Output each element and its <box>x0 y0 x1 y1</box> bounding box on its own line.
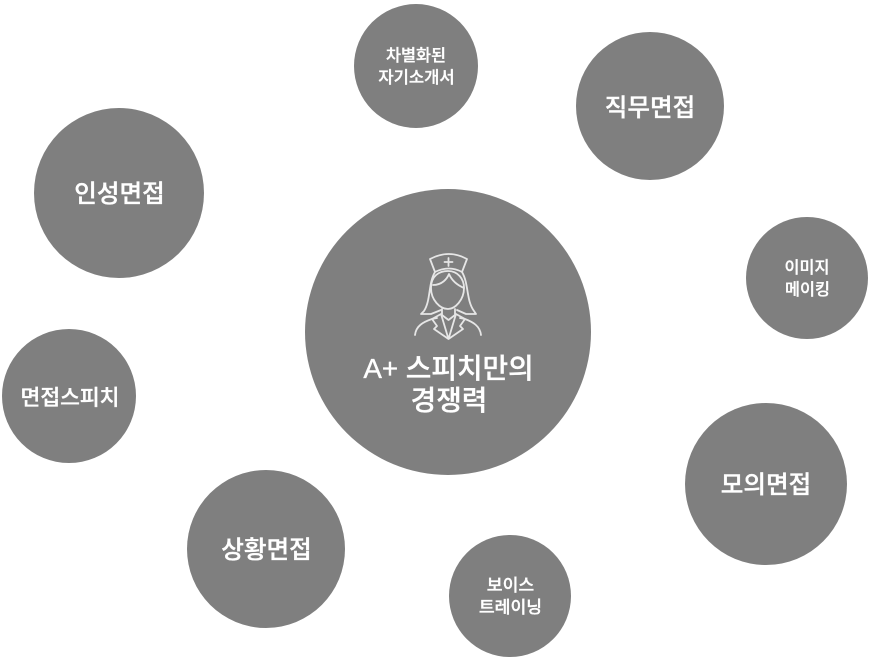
circle: 보이스 트레이닝: 트레이닝 <box>479 597 542 617</box>
circle: 이미지 메이킹: 이미지 <box>785 259 829 277</box>
circle: 상황면접 <box>187 470 345 628</box>
icon: nurse <box>415 254 481 339</box>
circle: 차별화된 자기소개서: 자기소개서 <box>378 68 455 87</box>
central circle: A+ 스피치만의 경쟁력: 경쟁력 <box>411 385 487 416</box>
circle: 이미지 메이킹 <box>746 217 868 339</box>
circle: 보이스 트레이닝: 보이스 <box>487 575 534 595</box>
circle: 직무면접 <box>576 32 724 180</box>
circle: 직무면접: 직무면접 <box>605 94 695 122</box>
circle: 면접스피치 <box>2 329 136 463</box>
central circle: A+ 스피치만의 경쟁력: A+ 스피치만의 <box>363 353 534 384</box>
circle: 면접스피치: 면접스피치 <box>21 386 119 410</box>
circle: 모의면접: 모의면접 <box>721 471 811 499</box>
circle: 인성면접: 인성면접 <box>74 180 165 208</box>
circle: 상황면접: 상황면접 <box>221 536 312 564</box>
central circle: A+ 스피치만의 경쟁력 <box>305 189 591 475</box>
circle: 보이스 트레이닝 <box>449 535 571 657</box>
circle: 모의면접 <box>685 403 847 565</box>
circle: 이미지 메이킹: 메이킹 <box>785 281 830 299</box>
circle: 차별화된 자기소개서 <box>354 4 478 128</box>
circle: 인성면접 <box>34 108 204 278</box>
circle: 차별화된 자기소개서: 차별화된 <box>386 47 446 65</box>
